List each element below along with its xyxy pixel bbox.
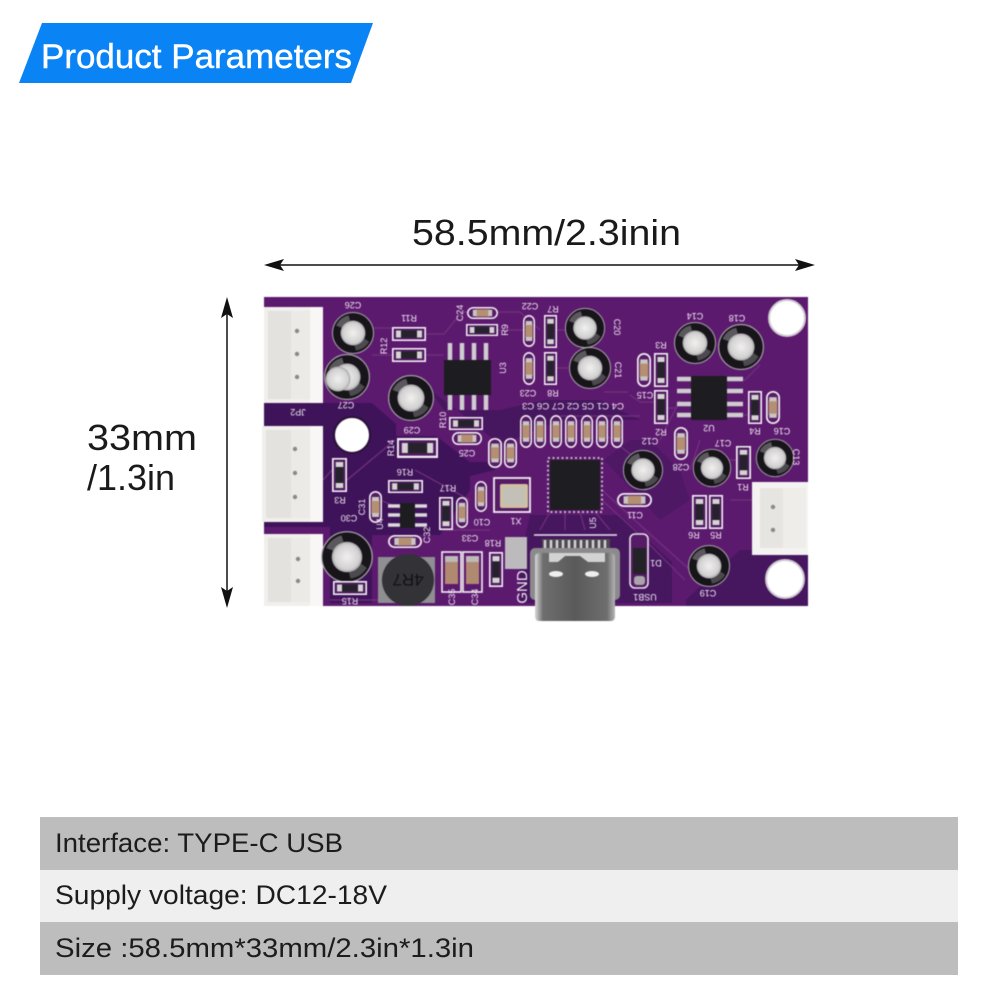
- silkscreen labels: R15: [342, 596, 358, 606]
- silkscreen labels: C33: [462, 533, 478, 543]
- silkscreen labels: C14: [687, 311, 703, 321]
- title banner: [19, 23, 373, 83]
- silkscreen labels: C35: [447, 589, 457, 605]
- silkscreen labels: R2: [655, 427, 667, 437]
- silkscreen labels: R6: [688, 530, 700, 540]
- silkscreen labels: C13: [791, 449, 801, 465]
- silkscreen labels: R16: [397, 467, 413, 477]
- silkscreen labels: C24: [455, 305, 465, 321]
- spec row: size: [40, 922, 958, 975]
- silkscreen labels: C23: [520, 388, 536, 398]
- silkscreen labels: C26: [345, 300, 361, 310]
- silkscreen labels: R10: [438, 412, 448, 428]
- width dimension: [264, 212, 815, 271]
- silkscreen labels: R4: [749, 426, 761, 436]
- inductor: [378, 554, 435, 606]
- diode D1: [630, 534, 648, 588]
- silkscreen labels: D1: [650, 558, 662, 568]
- width dimension: 58.5mm/2.3inin: [412, 212, 681, 253]
- crystal X1: [494, 478, 530, 512]
- chip U3: [444, 343, 491, 410]
- height dimension: 33mm: [87, 417, 197, 458]
- silkscreen labels: X1: [510, 516, 522, 526]
- silkscreen labels: C4 C1 C5 C2 C7 C6 C3: [522, 401, 624, 411]
- board substrate: [264, 297, 808, 606]
- mounting holes: [334, 300, 805, 598]
- connector middle: [262, 426, 323, 522]
- silkscreen labels: R1: [737, 482, 749, 492]
- circuit board photo: [262, 297, 808, 621]
- silkscreen labels: C10: [474, 517, 490, 527]
- silkscreen labels: U4: [375, 518, 385, 530]
- height dimension: /1.3in: [87, 457, 175, 498]
- silkscreen labels: C22: [522, 301, 538, 311]
- silkscreen labels: U5: [588, 517, 598, 529]
- chip U2: [677, 376, 743, 420]
- silkscreen labels: C30: [341, 513, 357, 523]
- chip U4: [388, 503, 427, 528]
- silkscreen labels: R3: [655, 340, 667, 350]
- connector bottom: [264, 534, 323, 606]
- spec row: size: Size :58.5mm*33mm/2.3in*1.3in: [55, 933, 474, 963]
- silkscreen labels: C16: [774, 426, 790, 436]
- ceramic capacitors: [370, 308, 779, 547]
- silkscreen labels: R17: [440, 483, 456, 493]
- silkscreen labels: U3: [498, 362, 508, 374]
- resistors: [333, 316, 761, 594]
- silkscreen labels: R8: [547, 388, 559, 398]
- silkscreen labels: C19: [700, 588, 716, 598]
- silkscreen labels: C27: [338, 400, 354, 410]
- spec row: supply voltage: Supply voltage: DC12-18V: [55, 880, 387, 910]
- silkscreen labels: U2: [703, 423, 715, 433]
- title banner: Product Parameters: [41, 38, 352, 76]
- silkscreen labels: R12: [379, 338, 389, 354]
- large capacitors C34 C35: [442, 552, 482, 592]
- silkscreen labels: R5: [710, 530, 722, 540]
- silkscreen labels: [290, 300, 801, 606]
- GND pad: [505, 537, 527, 569]
- spec row: interface: Interface: TYPE-C USB: [55, 828, 343, 858]
- silkscreen labels: R14: [386, 440, 396, 456]
- spec row: supply voltage: [40, 870, 958, 922]
- connector JP2: [264, 307, 323, 403]
- chip U1: [548, 458, 602, 512]
- silkscreen labels: C31: [357, 499, 367, 515]
- silkscreen labels: C34: [470, 589, 480, 605]
- silkscreen labels: R9: [500, 324, 510, 336]
- silkscreen labels: C17: [715, 438, 731, 448]
- silkscreen labels: C20: [612, 319, 622, 335]
- silkscreen labels: C18: [729, 313, 745, 323]
- height dimension: [87, 297, 233, 608]
- electrolytic capacitors: [322, 308, 794, 587]
- silkscreen labels: R3: [334, 495, 346, 505]
- silkscreen labels: C11: [627, 510, 643, 520]
- silkscreen labels: C12: [642, 436, 658, 446]
- silkscreen labels: R7: [547, 304, 559, 314]
- silkscreen labels: R18: [485, 538, 501, 548]
- silkscreen labels: GND: [514, 570, 531, 604]
- silkscreen labels: C15: [637, 390, 653, 400]
- USB Type-C connector: [530, 535, 620, 621]
- silkscreen labels: JP2: [290, 407, 306, 417]
- silkscreen labels: C21: [613, 362, 623, 378]
- connector right: [752, 482, 808, 555]
- silkscreen labels: C25: [459, 448, 475, 458]
- silkscreen labels: C32: [422, 527, 432, 543]
- inductor: 4R7: [392, 570, 424, 589]
- silkscreen labels: C28: [673, 462, 689, 472]
- spec row: interface: [40, 817, 958, 870]
- board traces: [323, 312, 760, 600]
- silkscreen labels: USB1: [633, 592, 657, 602]
- silkscreen labels: C29: [404, 425, 420, 435]
- silkscreen labels: R11: [401, 313, 417, 323]
